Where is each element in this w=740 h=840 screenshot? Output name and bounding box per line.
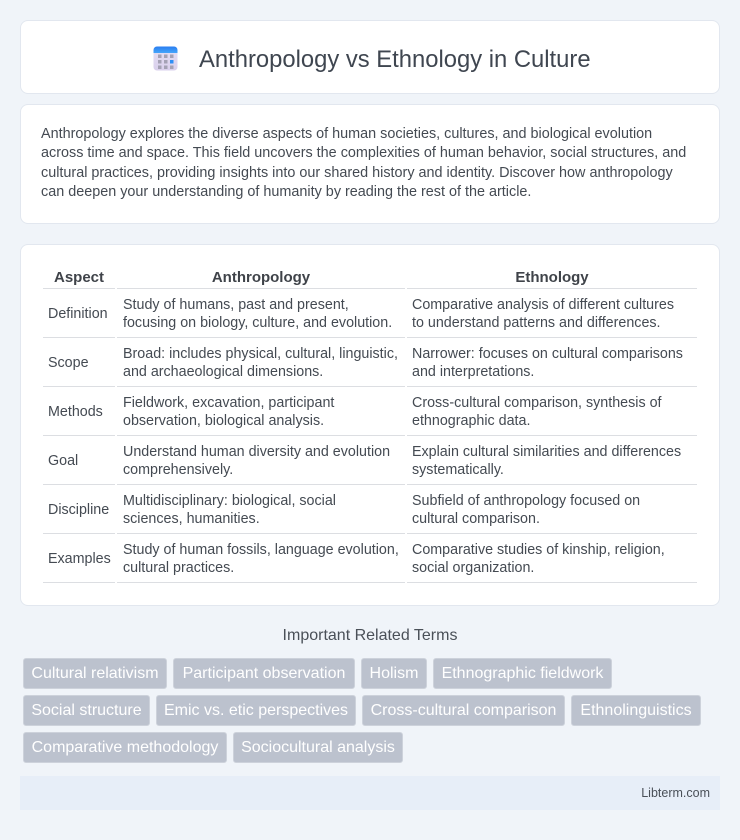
row: methods: Methods: [48, 404, 103, 420]
tag: Social structure: [31, 702, 142, 719]
row: discipline: Multidisciplinary: biological, social: [123, 493, 336, 509]
tag: Sociocultural analysis: [241, 739, 395, 756]
tag: Ethnolinguistics: [580, 702, 692, 719]
row: scope: [48, 346, 683, 380]
row: goal: systematically.: [412, 462, 504, 478]
tag: [23, 695, 150, 726]
footer credit: Libterm.com: [641, 786, 710, 800]
tag: Comparative methodology: [32, 739, 218, 756]
row: scope: and interpretations.: [412, 364, 534, 380]
row: definition: Study of humans, past and present,: [123, 297, 349, 313]
intro text: [41, 126, 686, 200]
table panel: [20, 244, 720, 606]
row: examples: Study of human fossils, language evolution,: [123, 542, 399, 558]
related terms heading: Important Related Terms: [283, 627, 457, 644]
comparison table: [43, 269, 697, 583]
icon: calendar: [154, 46, 178, 70]
row: examples: Examples: [48, 551, 111, 567]
row: examples: [48, 542, 665, 576]
row: definition: Comparative analysis of different cultures: [412, 297, 674, 313]
intro text: Anthropology explores the diverse aspects of human societies, cultures, and biological evolution: [41, 126, 652, 142]
tag: [23, 732, 227, 763]
intro panel: [20, 104, 720, 224]
row: goal: Understand human diversity and evolution: [123, 444, 390, 460]
row: definition: focusing on biology, culture, and evolution.: [123, 315, 392, 331]
table header: Anthropology: [212, 269, 310, 286]
row: methods: Fieldwork, excavation, participant: [123, 395, 334, 411]
row: scope: Broad: includes physical, cultural, linguistic,: [123, 346, 398, 362]
row: examples: cultural practices.: [123, 560, 234, 576]
row: scope: Scope: [48, 355, 89, 371]
row: goal: [48, 444, 681, 478]
table header: [54, 269, 589, 286]
tag: [23, 658, 167, 689]
tag: [362, 695, 565, 726]
tag: [156, 695, 356, 726]
intro text: cultural practices, providing insights into our shared history and identity. Discover how anthropology: [41, 165, 673, 181]
row: discipline: sciences, humanities.: [123, 511, 260, 527]
row: methods: observation, biological analysis.: [123, 413, 324, 429]
row: methods: [48, 395, 662, 429]
row: discipline: Discipline: [48, 502, 109, 518]
row: goal: Goal: [48, 453, 78, 469]
footer bar: [20, 776, 720, 810]
row: methods: ethnographic data.: [412, 413, 530, 429]
table header: Ethnology: [515, 269, 589, 286]
row: discipline: Subfield of anthropology focused on: [412, 493, 640, 509]
row: definition: [48, 297, 674, 331]
row: examples: Comparative studies of kinship, religion,: [412, 542, 665, 558]
table header: Aspect: [54, 269, 104, 286]
tag: [361, 658, 427, 689]
intro text: across time and space. This field uncovers the complexities of human behavior, social structures, and: [41, 145, 686, 161]
tag: Cultural relativism: [31, 665, 159, 682]
header panel: [20, 20, 720, 94]
row: goal: comprehensively.: [123, 462, 233, 478]
row: scope: and archaeological dimensions.: [123, 364, 323, 380]
row: examples: social organization.: [412, 560, 534, 576]
tag: [233, 732, 403, 763]
tag: Holism: [370, 665, 418, 682]
title: Anthropology vs Ethnology in Culture: [199, 46, 591, 73]
tag: Ethnographic fieldwork: [442, 665, 603, 682]
row: goal: Explain cultural similarities and differences: [412, 444, 681, 460]
intro text: can deepen your understanding of humanity by reading the rest of the article.: [41, 184, 531, 200]
row: definition: to understand patterns and differences.: [412, 315, 661, 331]
row: discipline: [48, 493, 640, 527]
tag: [433, 658, 612, 689]
row: methods: Cross-cultural comparison, synthesis of: [412, 395, 662, 411]
tag: [173, 658, 355, 689]
related terms tags: [23, 658, 701, 763]
tag: Participant observation: [183, 665, 345, 682]
tag: Emic vs. etic perspectives: [164, 702, 348, 719]
tag: [571, 695, 701, 726]
row: scope: Narrower: focuses on cultural comparisons: [412, 346, 683, 362]
row: discipline: cultural comparison.: [412, 511, 540, 527]
tag: Cross-cultural comparison: [371, 702, 556, 719]
row: definition: Definition: [48, 306, 108, 322]
